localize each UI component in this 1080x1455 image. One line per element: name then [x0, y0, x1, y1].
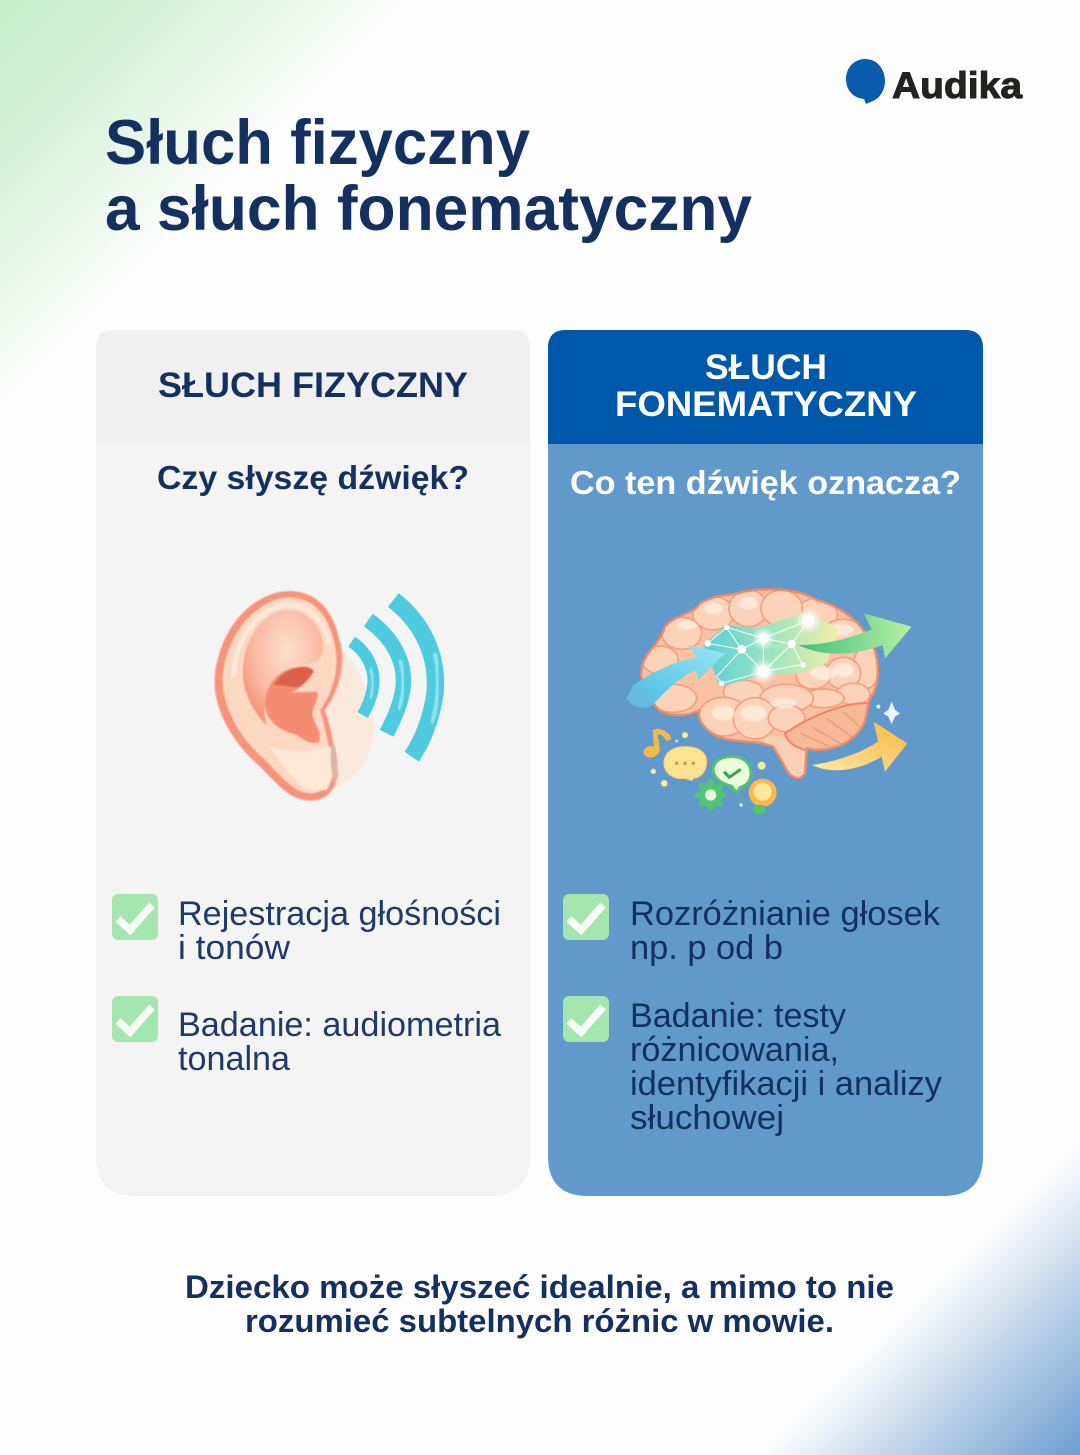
title	[105, 108, 752, 244]
neural network highlight	[703, 611, 840, 687]
icon: gear	[695, 779, 726, 811]
arrow: green	[798, 613, 912, 658]
panel: słuch fonematyczny	[548, 330, 983, 1196]
title: Słuch fizyczny	[105, 108, 530, 178]
panel header: słuch fonematyczny: FONEMATYCZNY	[615, 385, 917, 424]
icon: check	[112, 996, 158, 1042]
item: testy: Badanie: testy	[630, 997, 846, 1035]
icon: check	[563, 894, 609, 940]
footer text: Dziecko może słyszeć idealnie, a mimo to nie	[185, 1269, 894, 1305]
arrow: yellow	[812, 722, 907, 772]
icon: check bubble	[713, 757, 751, 793]
panel header: słuch fonematyczny	[548, 330, 983, 444]
panel: słuch fizyczny	[96, 330, 530, 1196]
icon: ear with sound waves	[215, 591, 438, 801]
item: audiometria	[112, 996, 501, 1078]
panel header: słuch fizyczny	[96, 330, 530, 444]
question: co ten dźwięk oznacza: Co ten dźwięk oznacza?	[570, 464, 961, 501]
item: audiometria: Badanie: audiometria	[178, 1006, 501, 1044]
brain	[641, 589, 880, 783]
item: testy: różnicowania,	[630, 1031, 839, 1069]
icon: music note	[643, 728, 672, 757]
footer text: rozumieć subtelnych różnic w mowie.	[245, 1303, 834, 1339]
item: rozróżnianie	[563, 894, 941, 967]
icon: brain with arrows	[627, 589, 912, 814]
logo: Audika: Audika	[892, 65, 1022, 106]
dots and stars	[651, 705, 880, 807]
icon: check	[563, 996, 609, 1042]
sound waves	[352, 600, 438, 757]
icon: chat bubble	[664, 747, 707, 781]
item: rejestracja	[112, 894, 501, 967]
item: rozróżnianie: np. p od b	[630, 929, 783, 967]
item: testy: identyfikacji i analizy	[630, 1065, 942, 1103]
item: rejestracja: i tonów	[178, 929, 290, 967]
item: rejestracja: Rejestracja głośności	[178, 895, 501, 933]
panel header: słuch fizyczny: SŁUCH FIZYCZNY	[158, 366, 468, 405]
item: testy	[563, 996, 942, 1137]
title: a słuch fonematyczny	[105, 174, 752, 244]
logo: Audika	[846, 59, 1022, 106]
question: czy słyszę dźwięk: Czy słyszę dźwięk?	[157, 459, 469, 496]
item: testy: słuchowej	[630, 1099, 784, 1137]
icon: light bulb	[749, 779, 777, 814]
panel header: słuch fonematyczny: SŁUCH	[705, 348, 827, 387]
icon: sparkle	[883, 702, 900, 724]
item: audiometria: tonalna	[178, 1040, 290, 1078]
icon: check	[112, 894, 158, 940]
arrow: blue	[627, 645, 725, 708]
item: rozróżnianie: Rozróżnianie głosek	[630, 895, 941, 933]
